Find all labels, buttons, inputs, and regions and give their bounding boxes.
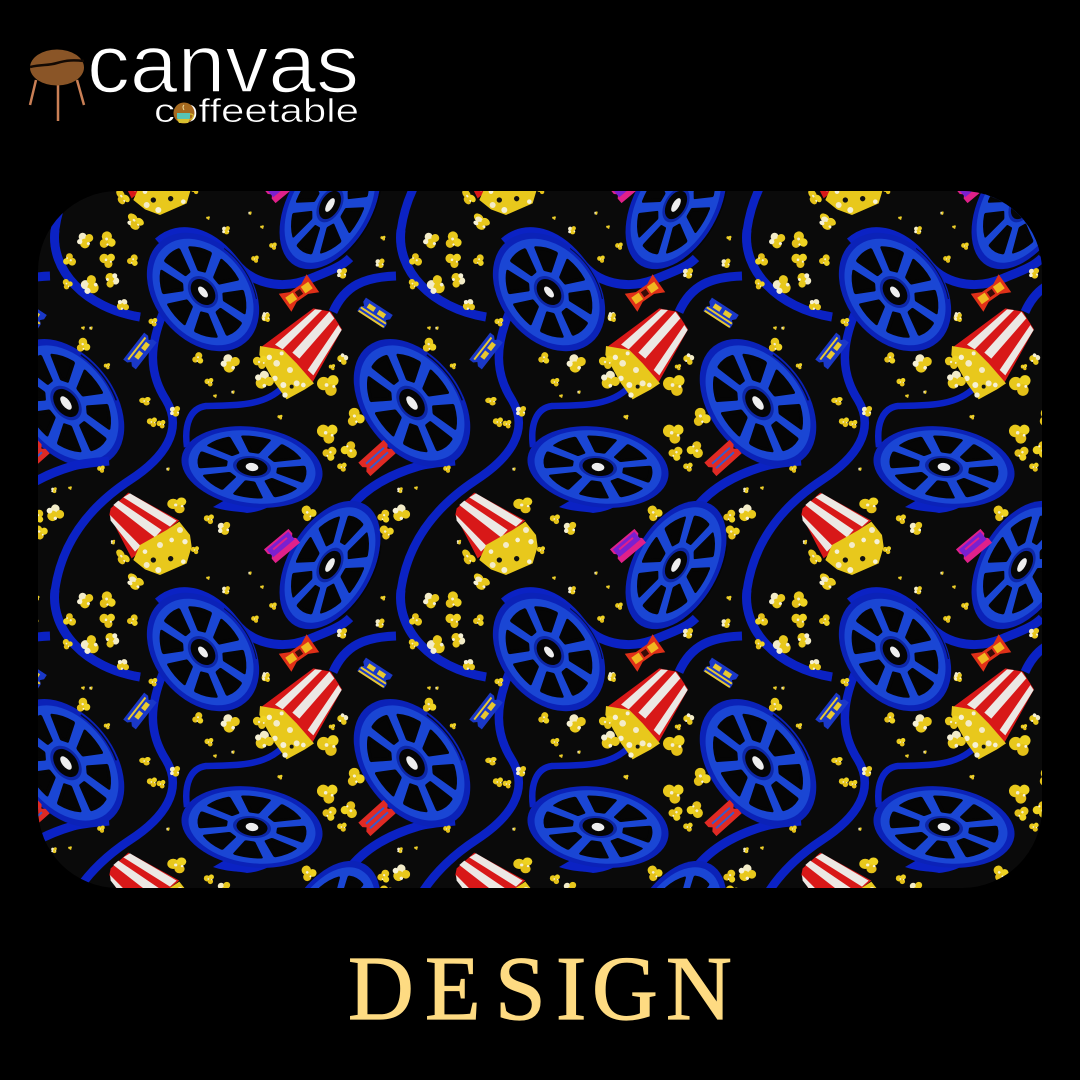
- reel three: [0, 317, 148, 489]
- ticket: blue left: [123, 333, 157, 369]
- ticket: purple: [264, 529, 300, 563]
- popcorn box one: [252, 308, 350, 399]
- ticket: blue right: [357, 298, 393, 328]
- film strip: popcorn top: [333, 276, 396, 312]
- reel two: [259, 483, 402, 647]
- film strip: to reel three: [347, 461, 455, 512]
- icon: coffee cup: [174, 102, 194, 124]
- ticket: red: [358, 440, 396, 476]
- film strip: tail: [213, 500, 272, 513]
- pattern repeats: reels: [38, 191, 1042, 888]
- film strip: popcorn lower: [186, 388, 282, 447]
- film strip: long wave: [55, 313, 173, 677]
- pattern repeats: popcorn and tickets: [38, 191, 1042, 888]
- title: DESIGN: DESIGN: [348, 938, 732, 1039]
- logo wordmark: canvas: [87, 17, 359, 110]
- reel one: [124, 211, 282, 373]
- film strip: reel to reel: [158, 232, 350, 285]
- icon: coffee bean table: [30, 50, 84, 121]
- pattern tile: popcorn and tickets: [30, 211, 396, 591]
- logo: canvas coffeetable: [30, 17, 359, 129]
- logo subline: coffeetable: [154, 92, 359, 129]
- reel four: [176, 418, 328, 516]
- film strip: long wave upper end: [55, 230, 140, 317]
- popcorn box two: [109, 493, 230, 591]
- pattern tile: film reels and strips: [0, 211, 455, 677]
- popcorn kernels: [30, 211, 385, 541]
- panel: bath mat with film reel and popcorn pattern: [38, 191, 1042, 888]
- ticket: orange: [279, 274, 319, 312]
